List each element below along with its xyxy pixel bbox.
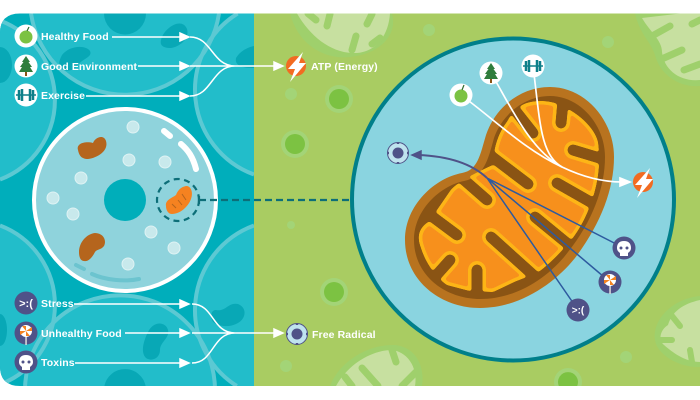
brown organelles — [78, 137, 106, 261]
icon: skull — [612, 236, 636, 260]
toxins item: Toxins — [41, 357, 75, 369]
cell highlights — [164, 131, 196, 169]
icon: dumbbell — [522, 54, 544, 78]
large zoom circle — [352, 38, 674, 360]
icon: tree — [480, 62, 502, 84]
good environment item — [14, 54, 138, 78]
energy lines — [461, 66, 630, 186]
stressor arrows — [74, 300, 283, 367]
icon: stress face — [566, 298, 590, 322]
background cell fills — [0, 14, 254, 386]
icon: stress face: >:( — [572, 306, 585, 316]
background green dots — [280, 24, 632, 386]
legend: inputs — [14, 24, 378, 106]
background mitochondrion bottom — [330, 345, 423, 386]
healthy food item: Healthy Food — [41, 31, 109, 43]
damage lines — [412, 151, 624, 310]
free radical label: Free Radical — [312, 329, 376, 341]
exercise item — [14, 84, 85, 106]
icon: lollipop — [598, 270, 622, 294]
input arrows — [86, 33, 283, 100]
icon: ATP bolt — [633, 168, 653, 198]
small mitochondrion — [166, 186, 192, 214]
legend: stressors — [14, 292, 376, 374]
dashed connector to zoomed mitochondrion — [157, 179, 350, 221]
healthy food item — [14, 24, 109, 48]
cristae fill — [422, 104, 596, 288]
background cell rings — [0, 14, 254, 386]
icon: free radical — [388, 142, 408, 164]
unhealthy food item — [14, 322, 122, 345]
main cell — [34, 109, 216, 291]
stress item: Stress — [41, 298, 74, 310]
inner membrane — [414, 96, 605, 299]
outer membrane — [405, 87, 614, 308]
icon: ATP — [286, 52, 306, 82]
icon: free radical — [286, 324, 308, 344]
stress item — [14, 292, 74, 314]
background mitochondrion right — [635, 14, 700, 86]
icon: apple — [450, 84, 472, 106]
exercise item: Exercise — [41, 90, 85, 102]
panel: green background — [254, 14, 700, 386]
vesicles — [47, 121, 180, 270]
ATP label: ATP (Energy) — [311, 61, 378, 73]
background mitochondrion lower right — [655, 296, 700, 367]
unhealthy food item: Unhealthy Food — [41, 328, 122, 340]
mitochondrion — [405, 87, 614, 308]
toxins item — [14, 350, 75, 374]
nucleus — [104, 179, 146, 221]
panel: cell background — [0, 14, 254, 386]
good environment item: Good Environment — [41, 61, 138, 73]
stress item: >:( — [19, 298, 33, 310]
cristae edge — [418, 101, 599, 292]
background organelles — [0, 14, 254, 386]
background mitochondrion top — [290, 14, 393, 57]
